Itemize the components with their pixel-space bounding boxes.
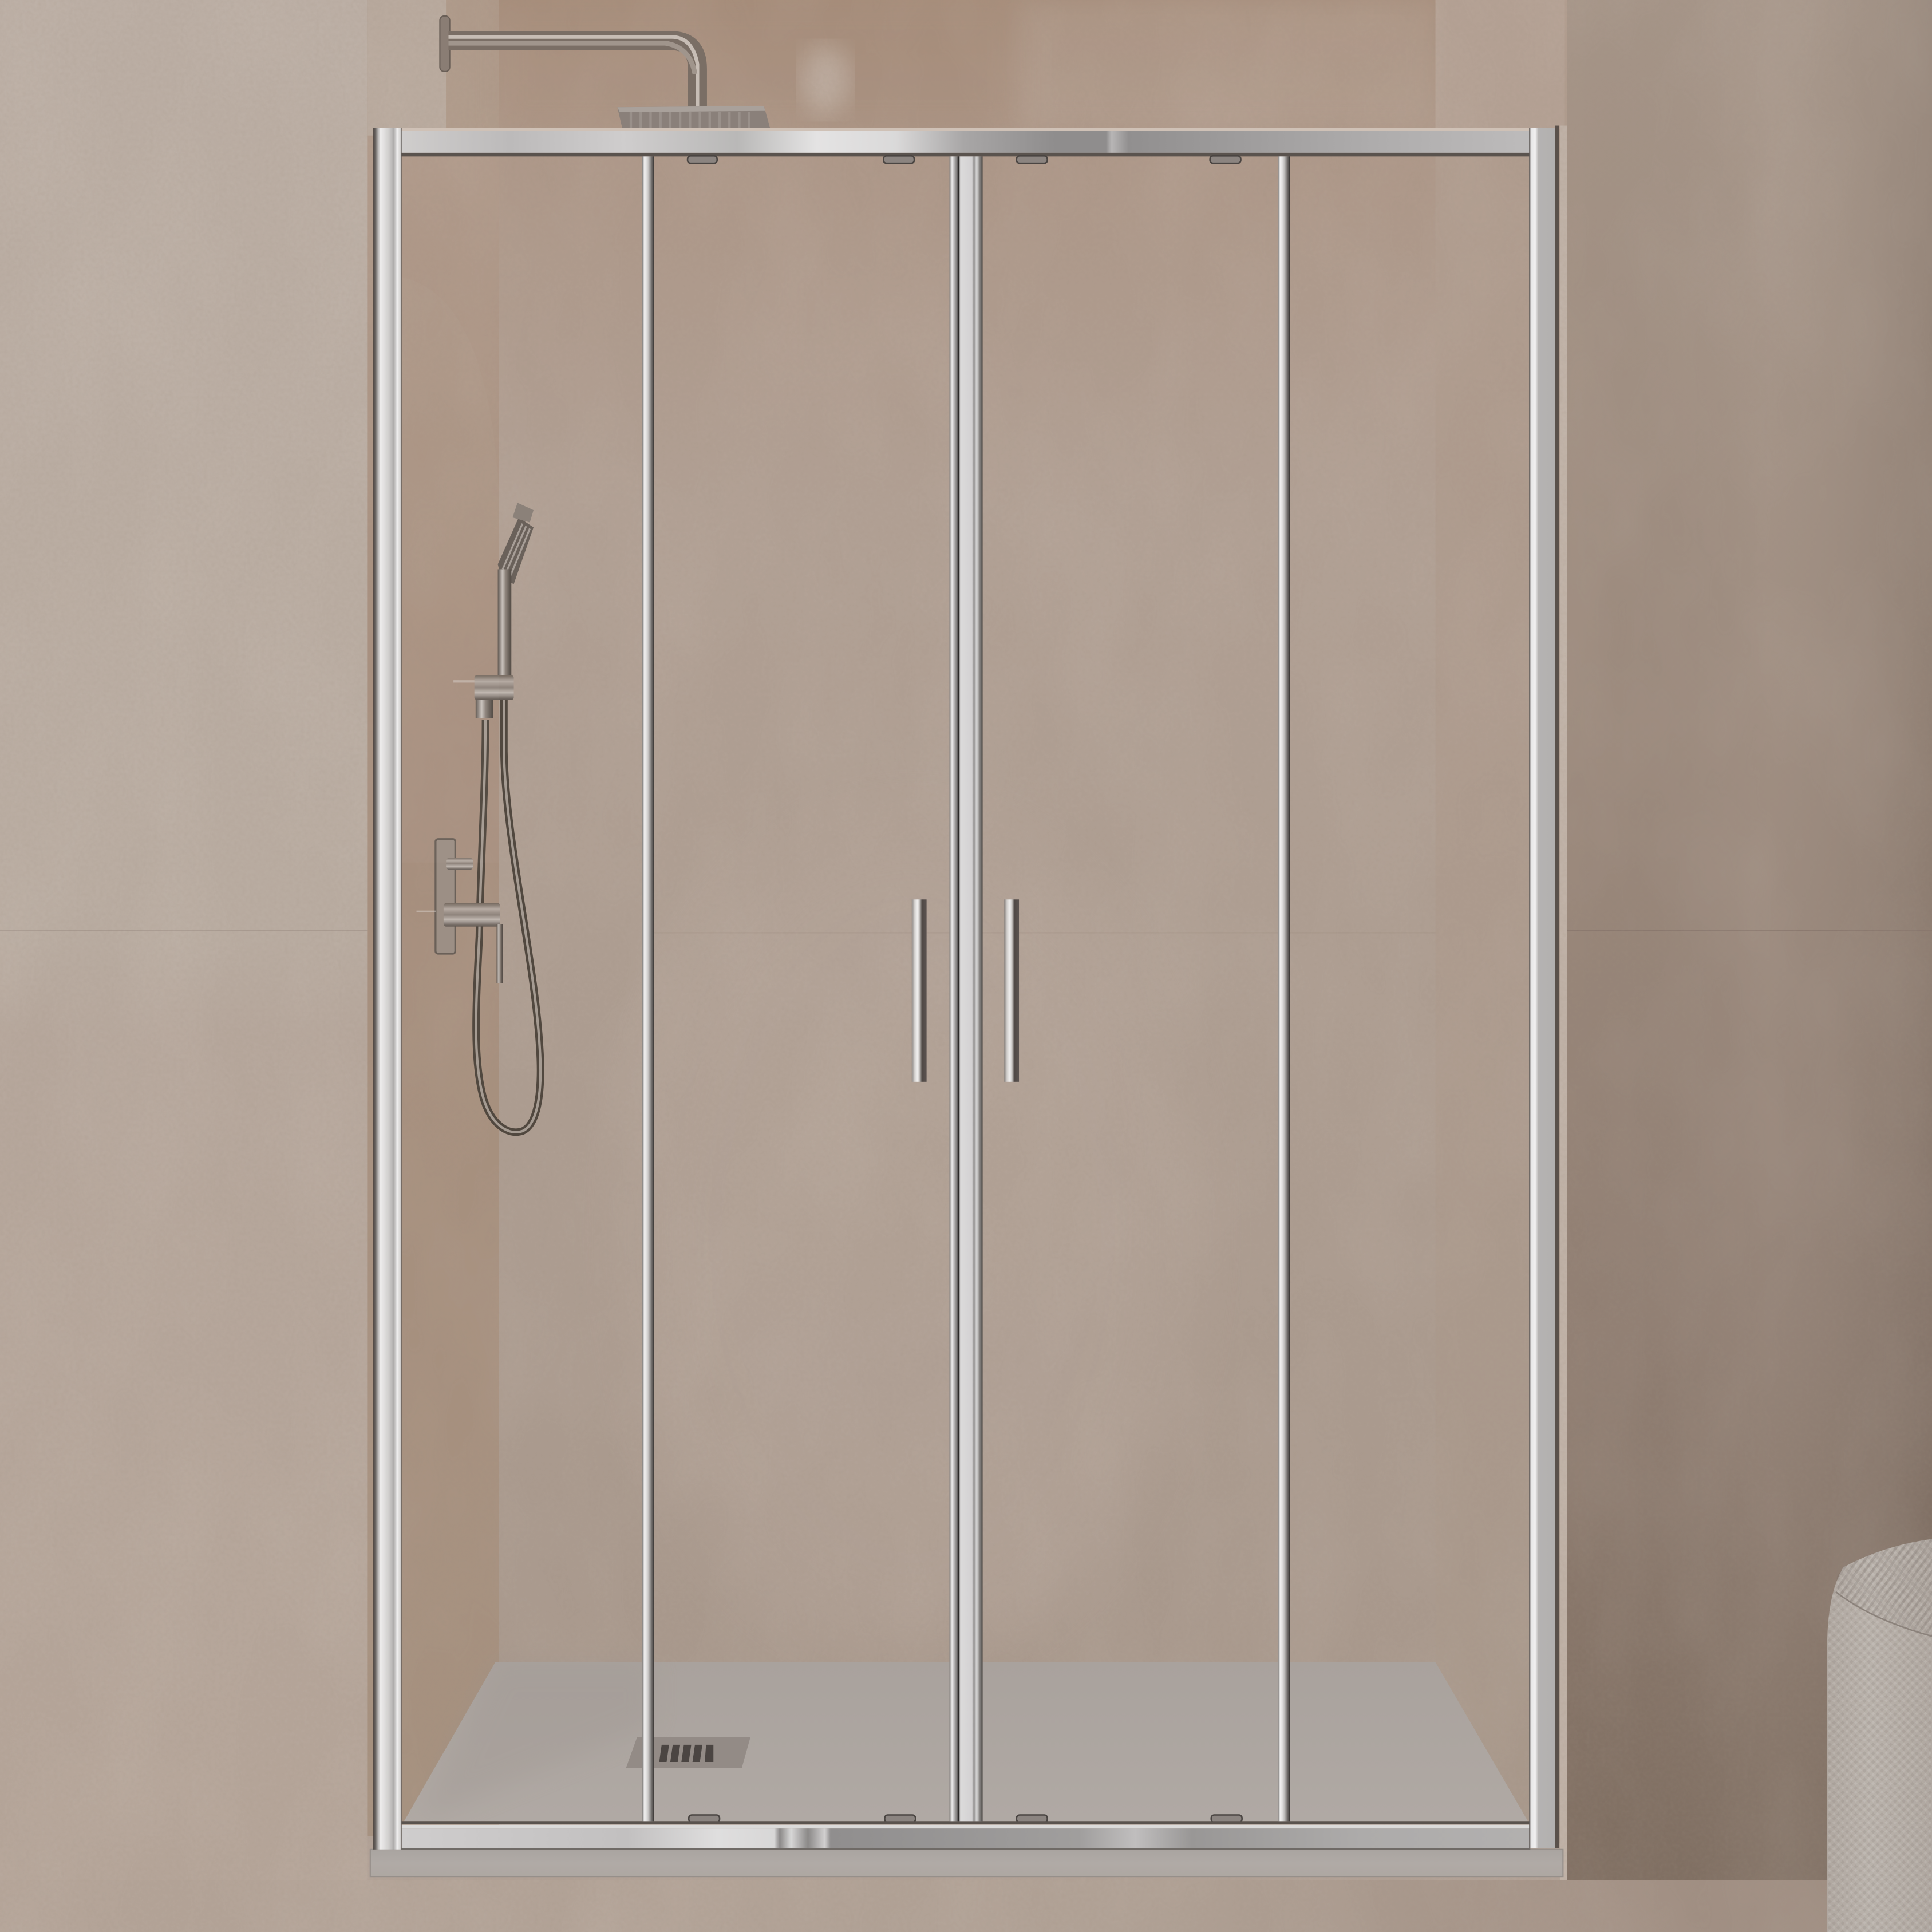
sliding door frame [373,126,1559,1850]
bracket [475,675,514,700]
mixer plate [436,839,455,954]
left wall panel [0,0,367,1882]
wall plate [440,16,450,72]
bottom rollers [689,1815,1242,1822]
shower head [617,106,770,128]
centre door stiles [949,156,983,1821]
faint reflection on glass [402,277,499,863]
mixer lever [496,924,503,983]
upper valve [446,858,473,870]
hose [476,697,540,1132]
curb under door [370,1850,1563,1876]
lower valve [444,903,500,927]
overhead rain shower [440,16,770,128]
floor [0,1880,1932,1932]
drain [626,1737,750,1768]
top rollers [688,156,1240,163]
top rail [397,128,1533,156]
recessed shower niche walls [367,0,1567,1848]
shower tray [404,1662,1528,1821]
left door stile [642,156,654,1821]
handle [498,569,511,675]
shower arm [448,41,697,106]
right door stile [1278,156,1290,1821]
left post [373,128,402,1850]
bottom rail [402,1821,1530,1850]
right wall panel [1560,0,1932,1882]
left door handle [912,899,927,1082]
hand shower head [498,517,534,584]
stool [1827,1539,1932,1932]
right door handle [1004,899,1019,1082]
right post [1529,126,1559,1848]
hand shower set [417,503,540,1132]
